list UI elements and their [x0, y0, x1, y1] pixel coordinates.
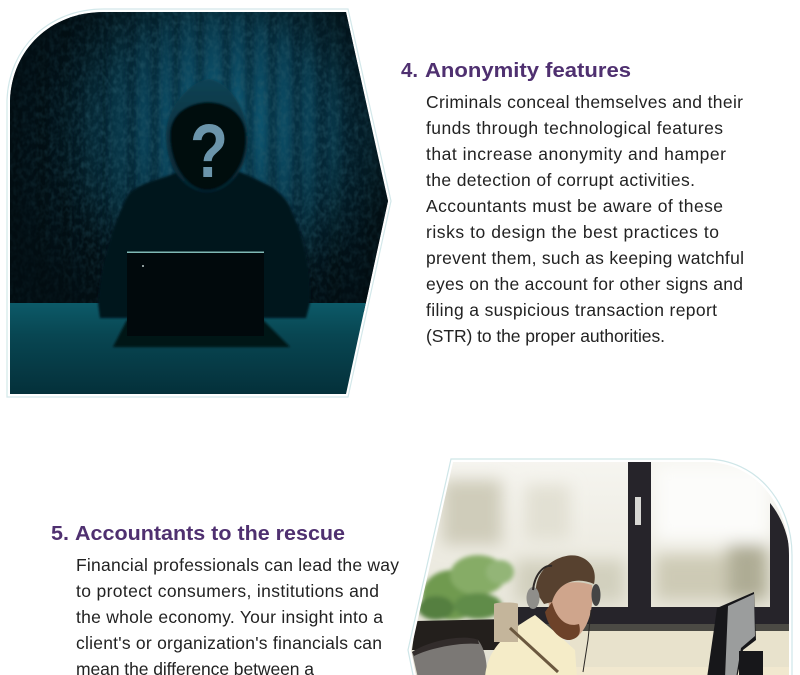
text block: anonymity description: the detection of corrupt activities. [426, 170, 695, 190]
panel: accountant photo with angled frame [405, 459, 795, 675]
wall and sill [500, 624, 795, 631]
text block: accountants description [76, 555, 399, 675]
plant [418, 555, 514, 620]
photo frame outline [7, 9, 391, 397]
heading: 5. Accountants to the rescue: Accountants to the rescue [75, 522, 345, 545]
chair [412, 638, 487, 675]
text block: anonymity description: Criminals conceal themselves and their [426, 92, 743, 112]
text block: anonymity description: (STR) to the proper authorities. [426, 326, 665, 346]
window frame [518, 462, 790, 627]
text block: anonymity description: funds through technological features [426, 118, 723, 138]
photo: hooded figure at laptop [10, 12, 390, 395]
text block: anonymity description [426, 92, 744, 346]
text block: accountants description: to protect consumers, institutions and [76, 581, 379, 601]
microphone on arm [494, 602, 558, 672]
blurred outdoor scenery [442, 465, 770, 602]
headphones [526, 587, 540, 609]
face void [170, 102, 246, 190]
heading: 5. Accountants to the rescue: 5. [51, 522, 69, 545]
planter [412, 619, 500, 650]
hooded figure silhouette [98, 79, 310, 318]
text block: anonymity description: prevent them, such as keeping watchful [426, 248, 744, 268]
man [485, 555, 600, 675]
text block: anonymity description: filing a suspicious transaction report [426, 300, 717, 320]
panel: anonymity photo with pointed frame [7, 9, 391, 397]
photo frame outline [408, 459, 792, 675]
text block: accountants description: the whole economy. Your insight into a [76, 607, 383, 627]
photo: man with headphones at a monitor [405, 459, 795, 675]
monitor [707, 592, 763, 675]
table [10, 303, 390, 395]
heading: 4. Anonymity features: 4. [401, 59, 418, 82]
laptop [113, 252, 290, 347]
heading: 4. Anonymity features: Anonymity features [425, 59, 631, 82]
text block: anonymity description: that increase anonymity and hamper [426, 144, 726, 164]
question mark: ? [190, 109, 228, 194]
text block: anonymity description: Accountants must be aware of these [426, 196, 723, 216]
text block: anonymity description: risks to design the best practices to [426, 222, 719, 242]
text block: anonymity description: eyes on the account for other signs and [426, 274, 743, 294]
text block: accountants description: Financial professionals can lead the way [76, 555, 399, 575]
text block: accountants description: client's or organization's financials can [76, 633, 382, 653]
